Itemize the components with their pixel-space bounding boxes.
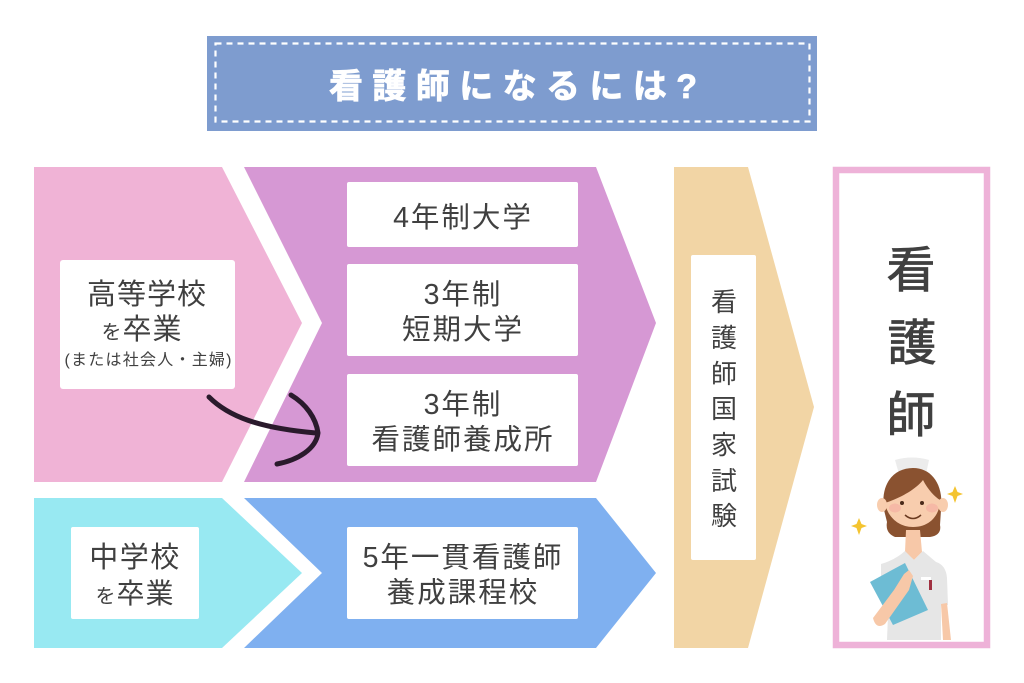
panel: nursing schools arrow bbox=[244, 167, 656, 482]
panel: national exam arrow: 試 bbox=[711, 466, 737, 496]
heading: nurse: 看 bbox=[886, 244, 936, 298]
icon: nurse illustration bbox=[851, 458, 963, 640]
panel: national exam arrow bbox=[674, 167, 814, 648]
panel: high school arrow: 高等学校 bbox=[87, 278, 207, 311]
panel: five-year program arrow: 5年一貫看護師 bbox=[363, 542, 563, 574]
panel: nursing schools arrow: 4年制大学 bbox=[393, 202, 533, 234]
panel: five-year program arrow bbox=[244, 498, 656, 648]
heading: nurse: 師 bbox=[886, 389, 936, 443]
panel: goal nurse bbox=[836, 170, 987, 645]
panel: nursing schools arrow: 看護師養成所 bbox=[371, 424, 555, 456]
panel: junior high arrow: を卒業 bbox=[95, 578, 175, 609]
arrow: hand-drawn black arrow bbox=[209, 395, 318, 464]
panel: national exam arrow: 験 bbox=[711, 501, 737, 531]
panel: nursing schools arrow: 短期大学 bbox=[402, 314, 524, 346]
panel: national exam arrow: 護 bbox=[711, 323, 737, 353]
panel: nursing schools arrow: 3年制 bbox=[424, 389, 502, 421]
heading: nurse bbox=[886, 244, 937, 443]
panel: national exam arrow: 看 bbox=[711, 287, 737, 317]
icon: sparkles bbox=[851, 486, 963, 535]
panel: high school arrow bbox=[34, 167, 302, 482]
panel: national exam arrow: 師 bbox=[711, 359, 737, 389]
panel: high school arrow: (または社会人・主婦) bbox=[64, 351, 232, 369]
panel: five-year program arrow: 養成課程校 bbox=[387, 577, 539, 609]
heading: nurse: 護 bbox=[887, 317, 937, 371]
title banner bbox=[207, 36, 817, 131]
panel: nursing schools arrow: 3年制 bbox=[424, 279, 502, 311]
title banner: 看護師になるには? bbox=[329, 68, 697, 106]
panel: junior high arrow bbox=[34, 498, 302, 648]
panel: high school arrow: を卒業 bbox=[101, 313, 183, 346]
panel: national exam arrow: 家 bbox=[711, 430, 737, 460]
panel: junior high arrow: 中学校 bbox=[89, 541, 181, 574]
panel: national exam arrow: 国 bbox=[711, 394, 737, 424]
